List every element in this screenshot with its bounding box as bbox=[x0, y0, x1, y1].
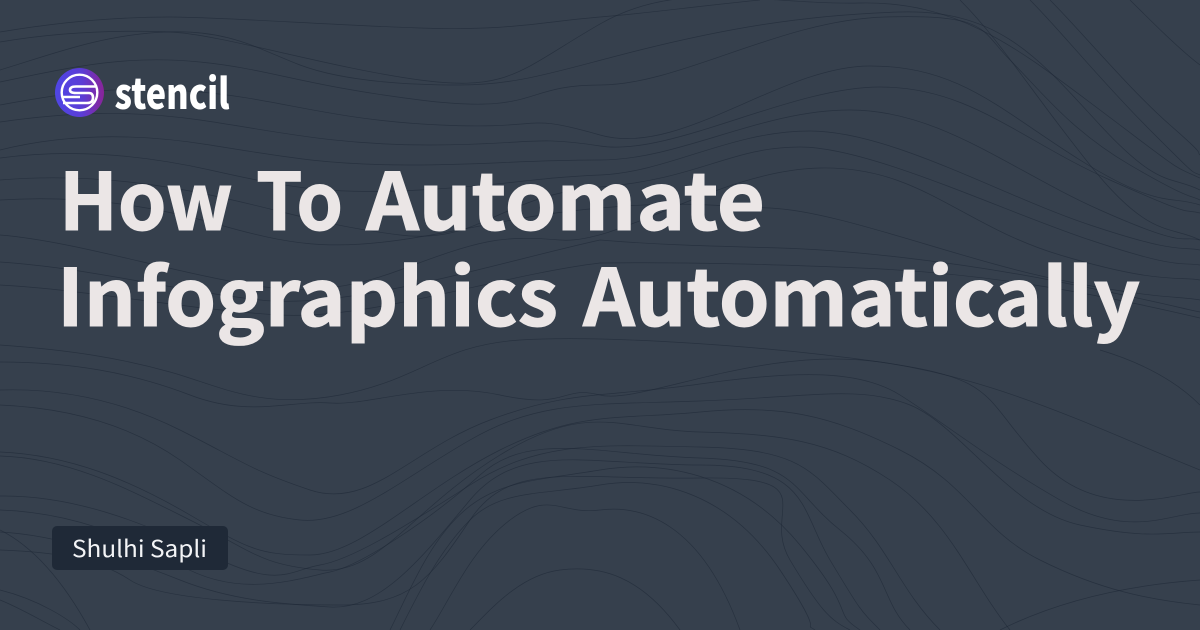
title bbox=[57, 138, 1140, 349]
title: Automate bbox=[365, 138, 765, 253]
author badge: Shulhi Sapli bbox=[72, 530, 207, 564]
title: Infographics bbox=[57, 234, 558, 349]
icon: stencil badge bbox=[55, 68, 104, 117]
logo wordmark: stencil bbox=[114, 61, 230, 122]
title: Automatically bbox=[582, 234, 1140, 349]
title: To bbox=[256, 138, 343, 253]
author badge bbox=[52, 526, 228, 570]
title: How bbox=[59, 138, 233, 253]
